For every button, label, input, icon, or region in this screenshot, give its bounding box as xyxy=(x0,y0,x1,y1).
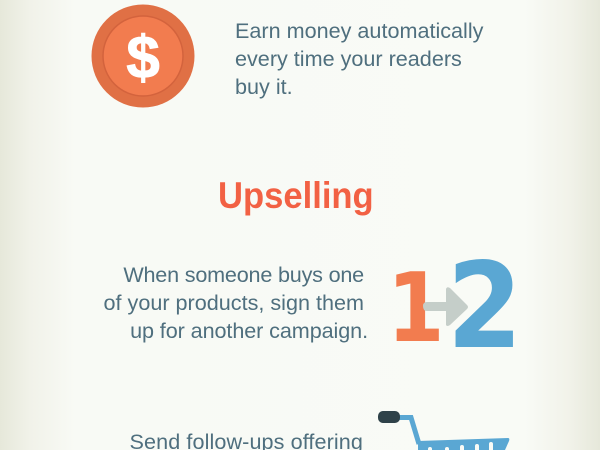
icon: dollar coin: $ xyxy=(126,24,160,91)
icon: dollar coin xyxy=(92,4,194,108)
cart handle arm xyxy=(397,418,419,444)
text block: upselling description: of your products, sign them xyxy=(104,290,364,315)
heading: Upselling: Upselling xyxy=(218,175,374,216)
arrow xyxy=(423,287,468,326)
cart basket xyxy=(418,438,509,450)
text block: upselling description: up for another campaign. xyxy=(130,318,368,343)
text block: earn money: buy it. xyxy=(235,74,293,99)
cart slots xyxy=(430,444,491,450)
cart grip xyxy=(378,411,400,423)
icon: one to two xyxy=(387,250,522,355)
text block: upselling description: When someone buys one xyxy=(123,262,364,287)
text block: earn money: Earn money automatically xyxy=(235,18,483,43)
text block: upselling description xyxy=(104,262,368,343)
text block: earn money xyxy=(235,18,484,99)
icon: shopping cart xyxy=(378,411,510,450)
text block: earn money: every time your readers xyxy=(235,46,462,71)
